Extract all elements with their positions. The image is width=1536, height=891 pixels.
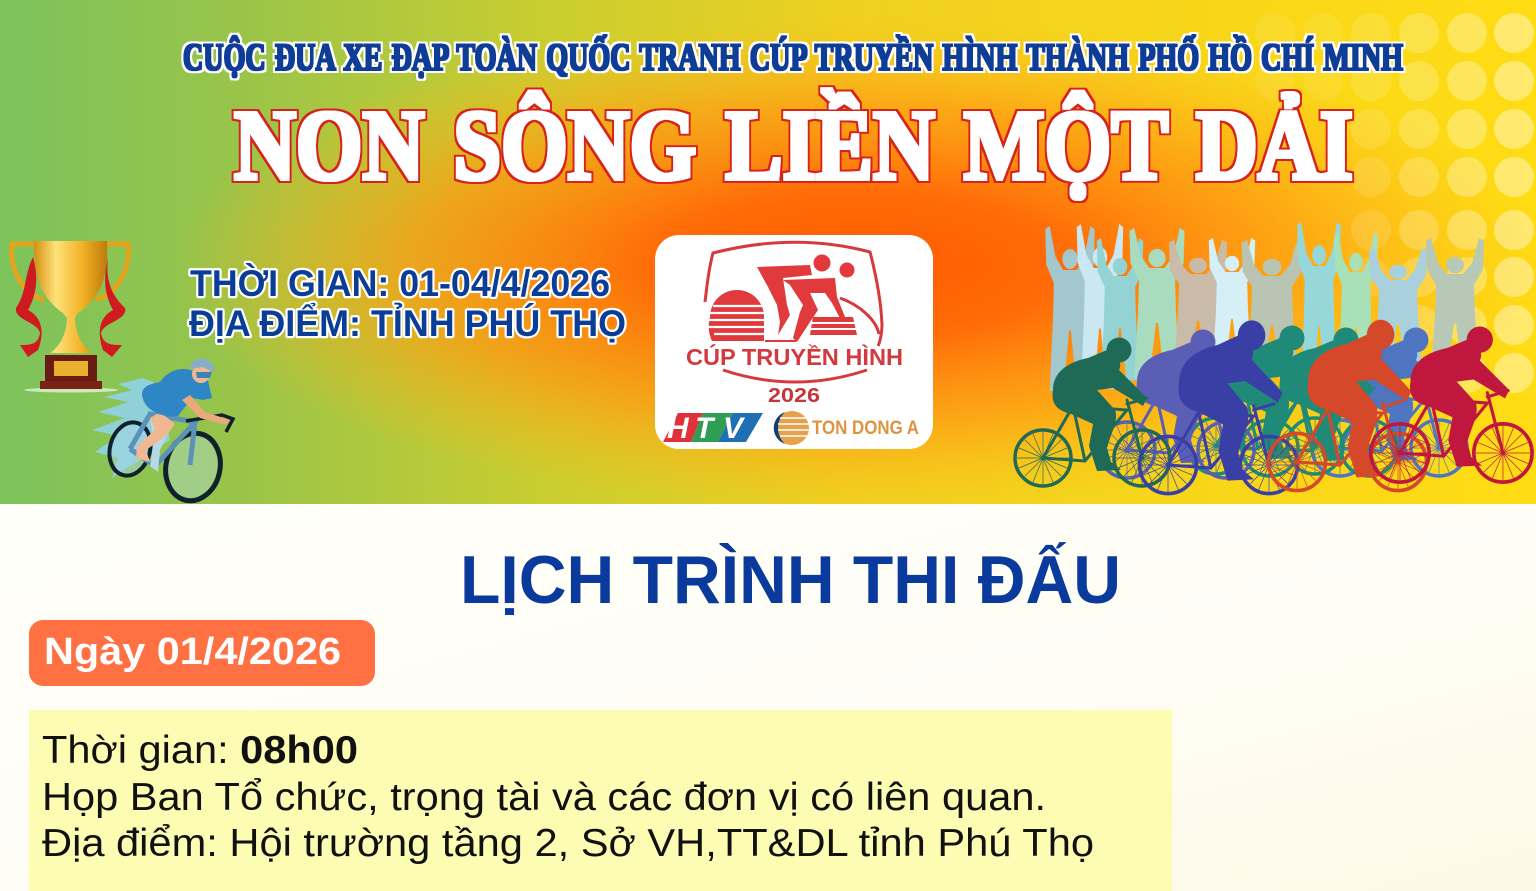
decorative dot grid [1255, 13, 1534, 393]
logo name: CÚP TRUYỀN HÌNH [686, 343, 903, 370]
date badge [29, 620, 375, 686]
date badge: Ngày 01/4/2026 [44, 631, 341, 673]
illustration: peloton of cyclists [1015, 320, 1532, 494]
logo: Ton Dong A: TON DONG A [812, 418, 919, 439]
logo: HTV [663, 412, 763, 445]
main title: NON SÔNG LIỀN MỘT DẢI [234, 87, 1353, 201]
time line: THỜI GIAN: 01-04/4/2026 [190, 262, 610, 304]
panel: schedule entry [29, 710, 1172, 891]
banner background [0, 0, 1536, 504]
entry location: Địa điểm: Hội trường tầng 2, Sở VH,TT&DL tỉnh Phú Thọ [42, 822, 1094, 865]
illustration: cheering crowd [1045, 222, 1484, 391]
logo emblem [705, 242, 882, 382]
lower background [0, 504, 1536, 891]
logo year: 2026 [768, 385, 820, 407]
section heading: LỊCH TRÌNH THI ĐẤU [460, 541, 1121, 618]
logo: HTV: H [667, 412, 690, 445]
icon: trophy [12, 241, 128, 392]
venue line: ĐỊA ĐIỂM: TỈNH PHÚ THỌ [189, 302, 626, 344]
entry description: Họp Ban Tổ chức, trọng tài và các đơn vị có liên quan. [42, 776, 1046, 819]
logo: HTV: T [695, 412, 716, 445]
panel: event logo [655, 235, 933, 449]
entry time: Thời gian: 08h00 [42, 729, 358, 772]
icon: cyclist with speed splash [92, 358, 233, 506]
schedule info [189, 262, 626, 344]
logo: HTV: V [723, 412, 746, 445]
logo: Ton Dong A [774, 411, 919, 445]
